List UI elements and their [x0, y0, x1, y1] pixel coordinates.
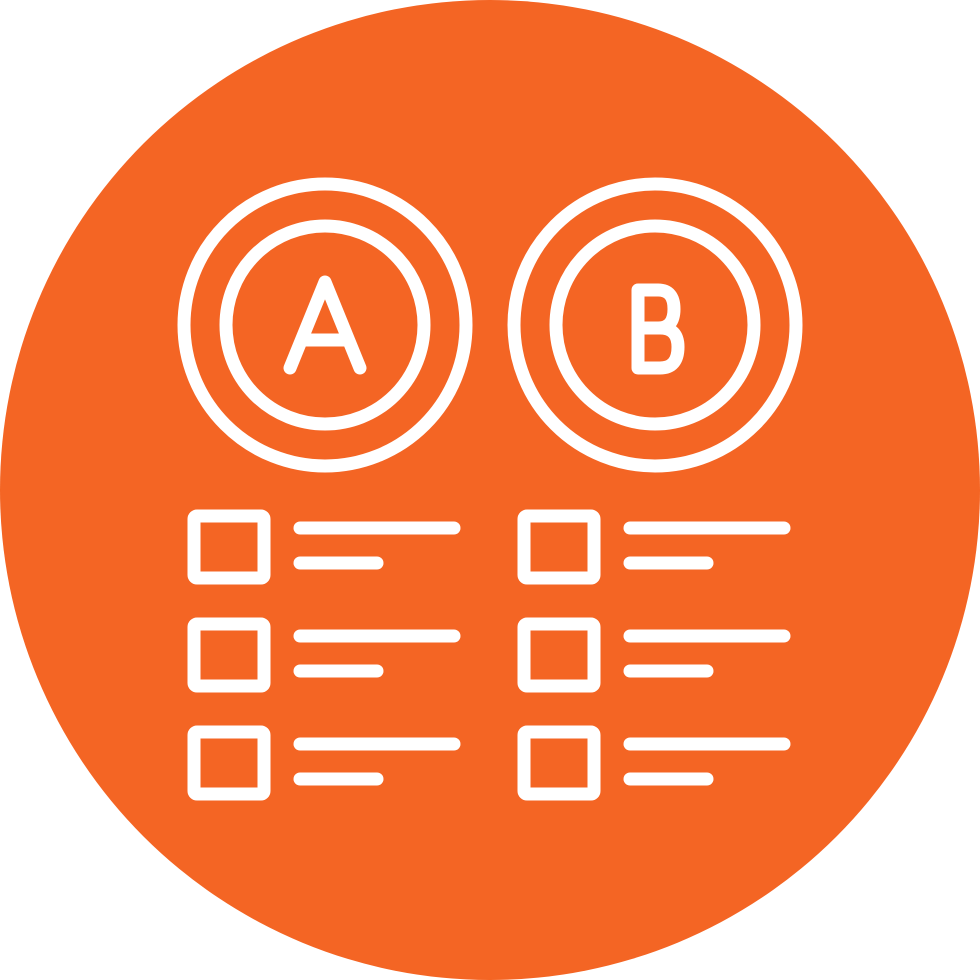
- option B badge: [514, 184, 796, 466]
- option A badge: [184, 184, 466, 466]
- checklist B: [524, 516, 784, 794]
- checklist A: [194, 516, 454, 794]
